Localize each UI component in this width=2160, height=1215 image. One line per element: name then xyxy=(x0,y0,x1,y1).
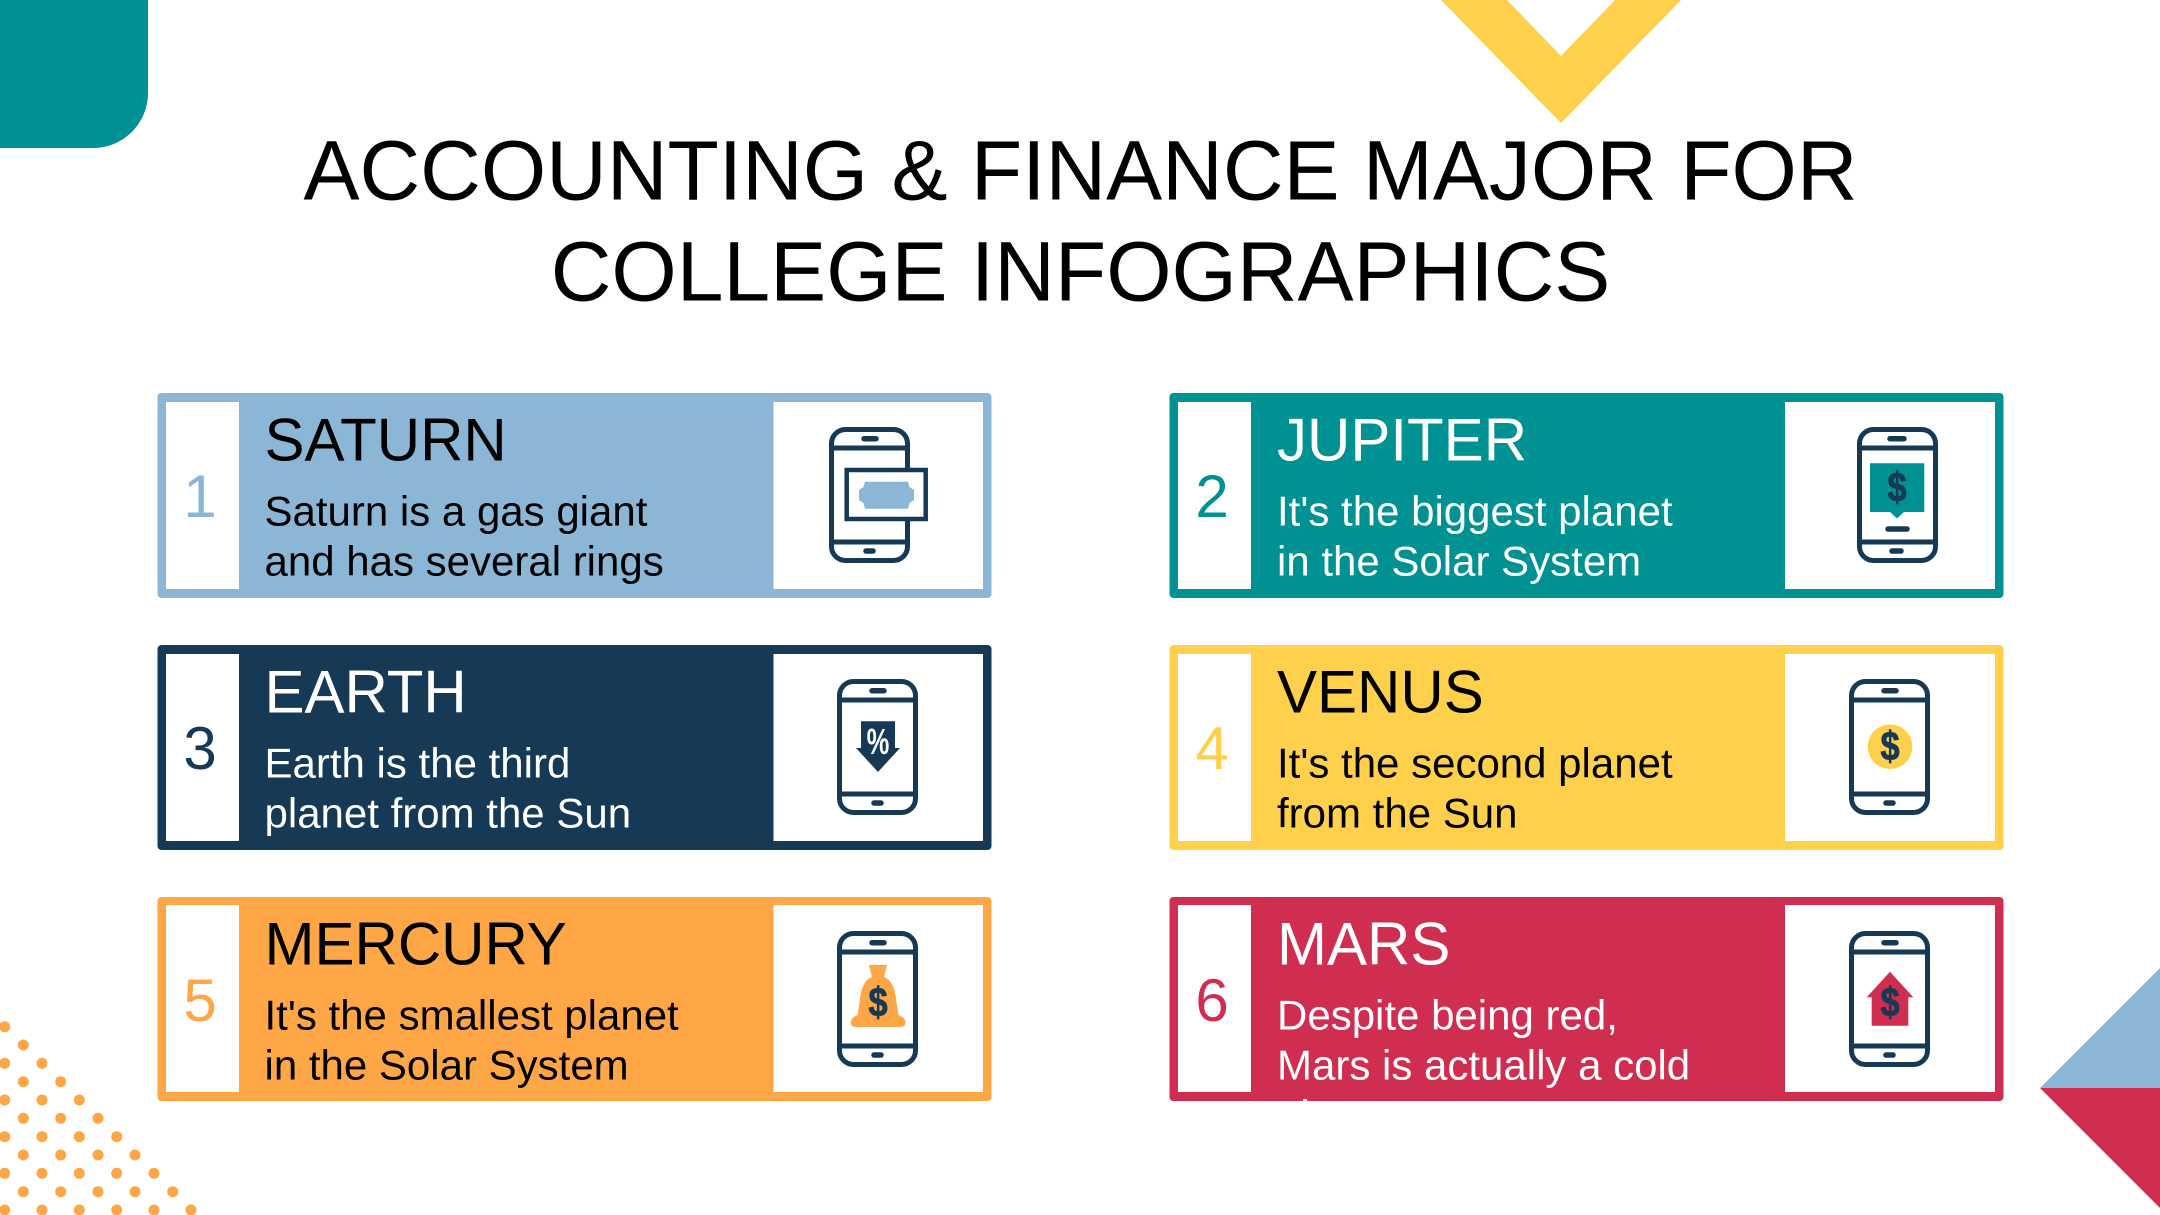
icon: phone with dollar coin xyxy=(1852,682,1928,812)
icon: phone with percent down arrow: % xyxy=(867,722,889,762)
text: Mars description: Despite being red, xyxy=(1277,992,1618,1038)
number 2: 2 xyxy=(1195,463,1229,530)
text: Jupiter description xyxy=(1277,488,1673,584)
text: Mercury description xyxy=(264,992,679,1088)
decoration: teal corner xyxy=(0,0,148,148)
text: Earth description: planet from the Sun xyxy=(264,790,631,836)
text: Venus description: It's the second planet xyxy=(1277,740,1673,786)
number 4: 4 xyxy=(1195,715,1229,782)
panel: Saturn xyxy=(158,393,992,598)
text: Mars description: Mars is actually a cold xyxy=(1277,1042,1690,1088)
text: Mercury description: It's the smallest planet xyxy=(264,992,679,1038)
icon: phone with percent down arrow xyxy=(840,682,916,812)
icon: phone with money bag xyxy=(840,934,916,1064)
decoration: yellow chevron xyxy=(1441,0,1681,123)
icon: phone with money bag: $ xyxy=(868,979,888,1025)
text: Jupiter description: in the Solar System xyxy=(1277,538,1641,584)
heading: Venus: VENUS xyxy=(1277,658,1484,726)
text: Saturn description: and has several rings xyxy=(264,538,664,584)
number 3: 3 xyxy=(183,715,217,782)
text: Jupiter description: It's the biggest planet xyxy=(1277,488,1673,534)
icon: phone with banknote xyxy=(832,430,926,560)
number 1: 1 xyxy=(183,463,217,530)
heading: Saturn: SATURN xyxy=(264,406,507,474)
title: ACCOUNTING & FINANCE MAJOR FOR xyxy=(303,124,1858,218)
text: Saturn description xyxy=(264,488,664,584)
icon: phone with dollar message: $ xyxy=(1887,464,1907,510)
heading: Earth: EARTH xyxy=(264,658,467,726)
text: Mars description xyxy=(1277,992,1690,1138)
panel: Venus xyxy=(1170,645,2004,850)
panel: Mars xyxy=(1170,897,2004,1138)
text: Mars description: planet xyxy=(1277,1092,1392,1138)
icon: phone with dollar up arrow xyxy=(1852,934,1928,1064)
icon: phone with dollar coin: $ xyxy=(1880,723,1900,769)
heading: Mars: MARS xyxy=(1277,910,1450,978)
text: Mercury description: in the Solar System xyxy=(264,1042,629,1088)
text: Earth description xyxy=(264,740,631,836)
decoration: orange dot pattern xyxy=(0,1021,197,1215)
title xyxy=(303,124,1858,318)
decoration: blue and red triangles xyxy=(2040,968,2160,1208)
text: Saturn description: Saturn is a gas giant xyxy=(264,488,648,534)
text: Earth description: Earth is the third xyxy=(264,740,570,786)
panel: Mercury xyxy=(158,897,992,1101)
panel: Earth xyxy=(158,645,992,850)
number 6: 6 xyxy=(1195,967,1229,1034)
panel: Jupiter xyxy=(1170,393,2004,598)
heading: Jupiter: JUPITER xyxy=(1277,406,1527,474)
icon: phone with dollar up arrow: $ xyxy=(1880,979,1900,1025)
number 5: 5 xyxy=(183,967,217,1034)
text: Venus description xyxy=(1277,740,1673,836)
icon: phone with dollar message xyxy=(1860,430,1936,560)
title: COLLEGE INFOGRAPHICS xyxy=(551,224,1610,318)
text: Venus description: from the Sun xyxy=(1277,790,1517,836)
heading: Mercury: MERCURY xyxy=(264,910,567,978)
